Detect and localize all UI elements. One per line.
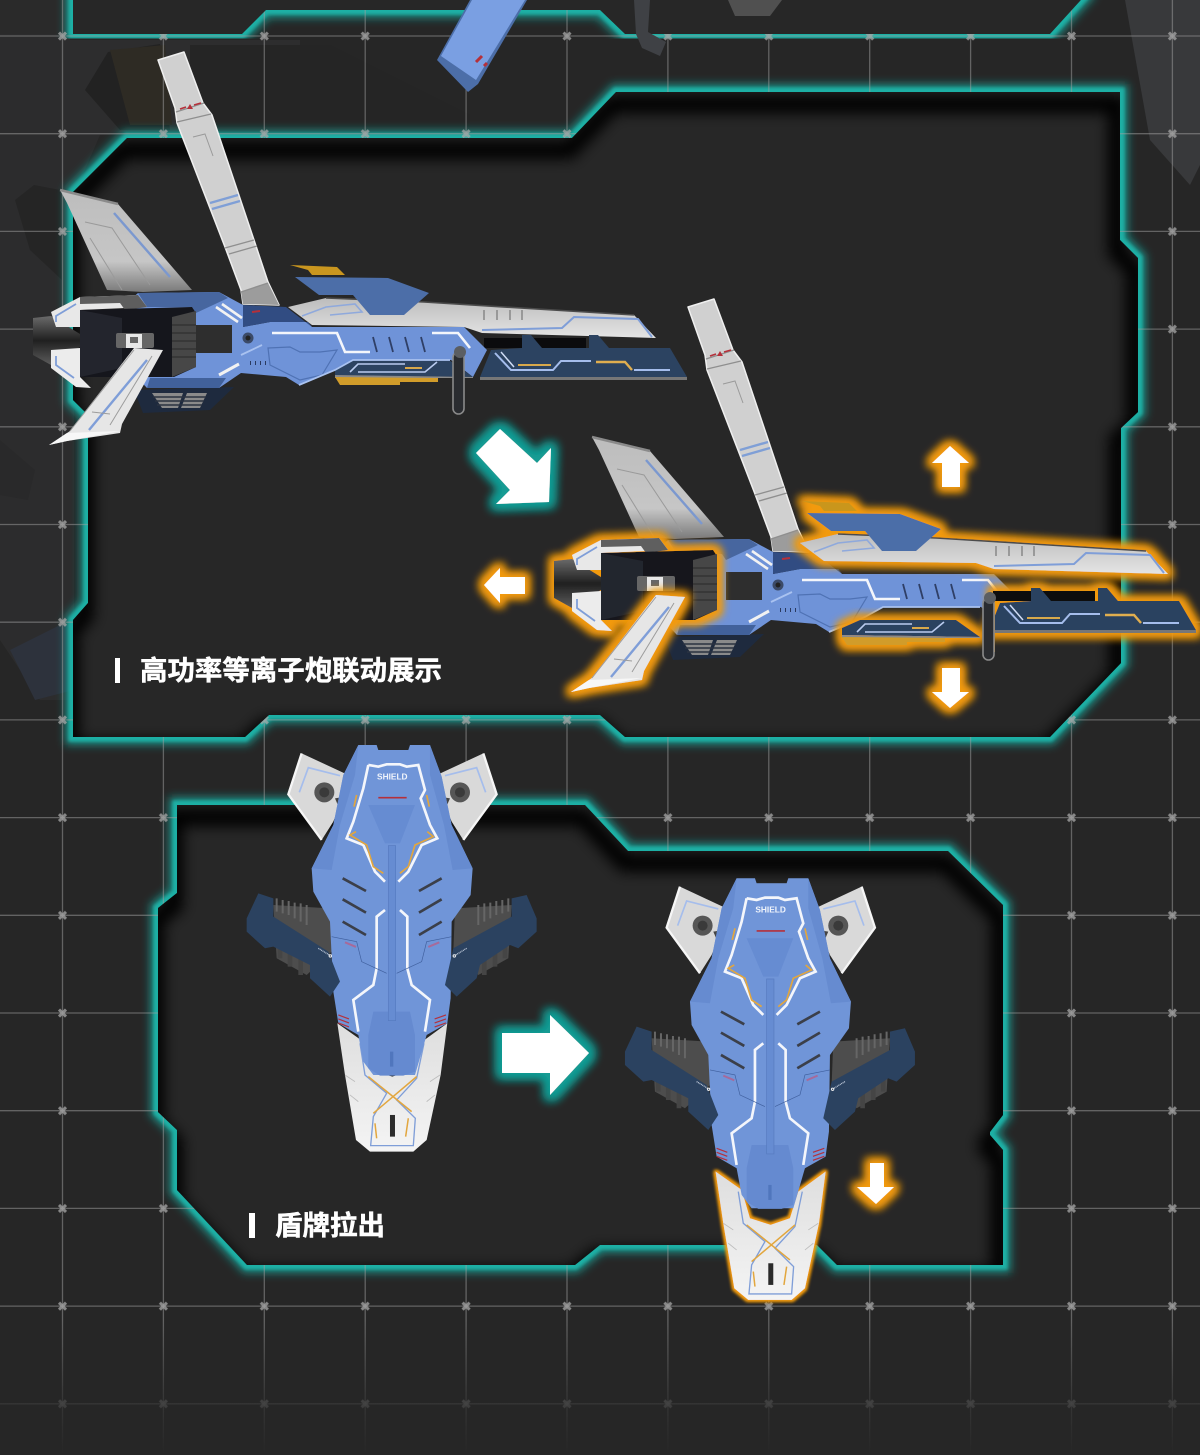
shield: extended state with highlighted tail [625,878,915,1300]
blue part fragment from previous panel [437,0,527,92]
cannon: extended state with highlighted parts [554,299,1196,692]
arrow: shield transition [502,1015,589,1095]
arrow: shield down [857,1163,894,1204]
arrow: cannon transition [476,429,551,504]
cannon: folded state [33,52,687,445]
panel frame glow [73,0,1138,1265]
shield: closed state [247,745,537,1152]
panel: top frame fragment [73,0,1090,34]
peg fragment from previous panel [634,0,782,56]
shield: closed state: SHIELD [377,771,408,781]
background mech silhouette [0,0,1200,700]
caption: shield: 盾牌拉出 [275,1210,385,1241]
panel: plasma cannon linkage [70,92,1138,749]
panel: shield extension [155,805,1003,1277]
caption: plasma cannon: 高功率等离子炮联动展示 [140,656,442,686]
arrow: down [932,668,969,708]
arrow: left [484,568,525,603]
arrow: up [932,446,969,487]
shield: extended state with highlighted tail: SHIELD [755,905,786,915]
